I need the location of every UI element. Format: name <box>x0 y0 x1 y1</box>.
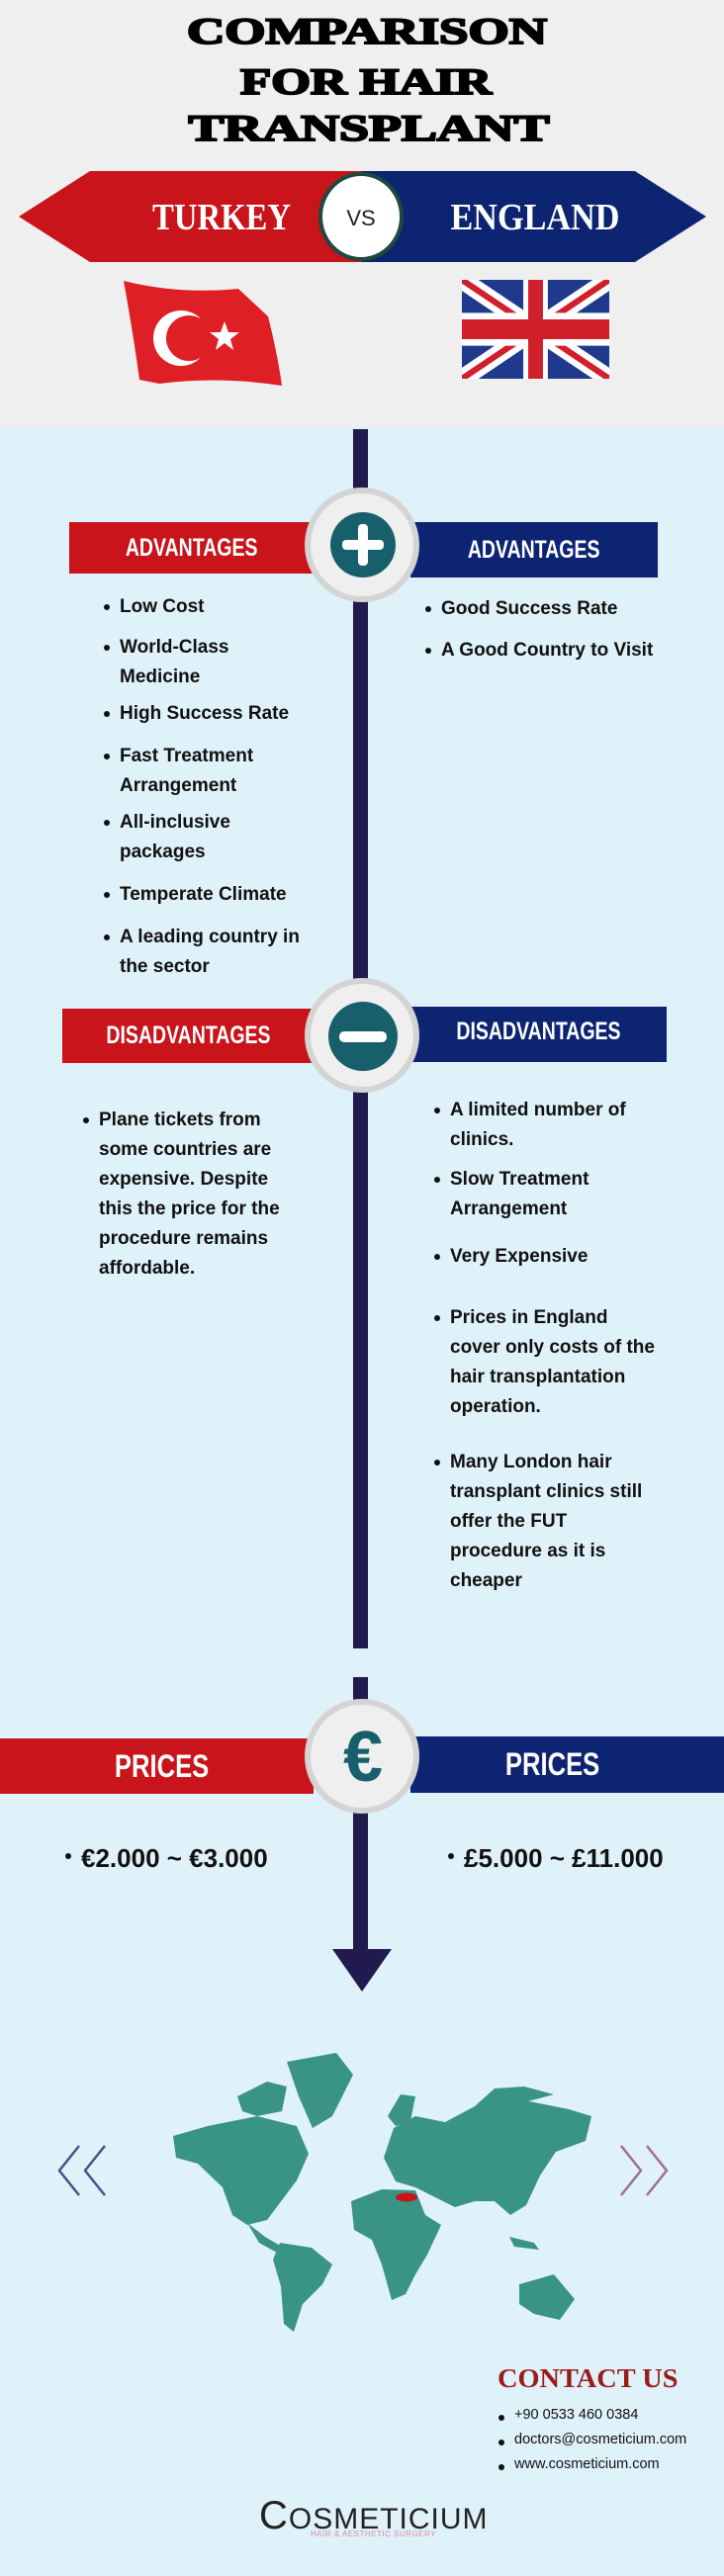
arrow head <box>332 1949 392 1992</box>
icon: euro: € <box>343 1718 383 1797</box>
contact list: doctors@cosmeticium.com <box>514 2432 686 2447</box>
list: england disadvantages: procedure as it is <box>450 1541 605 1561</box>
banner: turkey vs england: VS <box>346 206 376 230</box>
list: england advantages <box>425 598 653 661</box>
heading: england disadvantages <box>410 1007 667 1062</box>
list: turkey advantages: packages <box>120 842 206 862</box>
list: england disadvantages: Very Expensive <box>450 1246 588 1267</box>
list: turkey advantages: World-Class <box>120 637 229 658</box>
contact list <box>498 2407 686 2472</box>
icon: right chevrons <box>620 2145 669 2196</box>
list: england disadvantages: operation. <box>450 1396 541 1417</box>
icon: uk flag <box>462 280 609 379</box>
list: turkey advantages: Temperate Climate <box>120 884 287 905</box>
contact us <box>498 2363 686 2472</box>
panel: prices <box>0 1699 724 1873</box>
list: turkey disadvantages: procedure remains <box>99 1228 268 1249</box>
icon: plus <box>305 488 419 602</box>
world map <box>173 2053 591 2332</box>
list: england disadvantages: Slow Treatment <box>450 1169 588 1190</box>
text: turkey price: €2.000 ~ €3.000 <box>81 1843 268 1873</box>
list: england disadvantages: A limited number of <box>450 1100 626 1120</box>
list: england advantages: Good Success Rate <box>441 598 617 619</box>
heading: turkey prices: PRICES <box>115 1748 209 1784</box>
heading: turkey advantages <box>69 522 314 574</box>
heading: england prices: PRICES <box>505 1746 599 1782</box>
timeline line <box>353 429 368 1648</box>
list: england disadvantages: Many London hair <box>450 1452 612 1472</box>
title: TRANSPLANT <box>188 109 550 149</box>
list: turkey disadvantages <box>83 1110 280 1279</box>
heading: turkey disadvantages: DISADVANTAGES <box>106 1022 270 1049</box>
list: england disadvantages: cheaper <box>450 1570 522 1591</box>
list: turkey advantages: Low Cost <box>120 596 204 617</box>
heading: england disadvantages: DISADVANTAGES <box>456 1018 621 1045</box>
heading: turkey advantages: ADVANTAGES <box>126 534 257 562</box>
list: turkey disadvantages: some countries are <box>99 1139 271 1160</box>
title: FOR HAIR <box>240 62 494 103</box>
list: turkey disadvantages: expensive. Despite <box>99 1169 268 1190</box>
list: england disadvantages: hair transplantation <box>450 1367 625 1387</box>
title: COMPARISON <box>187 12 547 52</box>
list: turkey advantages: Medicine <box>120 666 200 687</box>
list: england disadvantages: transplant clinics still <box>450 1481 642 1502</box>
list: turkey advantages: All-inclusive <box>120 812 230 833</box>
list: turkey disadvantages: Plane tickets from <box>99 1110 261 1130</box>
panel: advantages <box>69 488 658 977</box>
panel: disadvantages <box>62 978 667 1591</box>
list: england disadvantages: clinics. <box>450 1129 513 1150</box>
banner: turkey vs england <box>19 171 706 262</box>
banner: turkey vs england: TURKEY <box>152 197 291 238</box>
list: england disadvantages: offer the FUT <box>450 1511 567 1532</box>
list: turkey advantages: Fast Treatment <box>120 746 253 766</box>
icon: minus <box>305 978 419 1093</box>
list: turkey advantages <box>104 596 300 977</box>
heading: england advantages <box>410 522 658 577</box>
contact list: www.cosmeticium.com <box>514 2456 660 2472</box>
list: england disadvantages: cover only costs of the <box>450 1337 655 1358</box>
list: england disadvantages: Prices in England <box>450 1307 607 1328</box>
list: england advantages: A Good Country to Visit <box>441 640 653 661</box>
heading: turkey prices <box>0 1738 314 1794</box>
contact list: +90 0533 460 0384 <box>514 2407 638 2423</box>
list: turkey advantages: A leading country in <box>120 927 300 947</box>
heading: turkey disadvantages <box>62 1009 314 1063</box>
banner: turkey vs england: ENGLAND <box>451 197 619 238</box>
list: england disadvantages: Arrangement <box>450 1199 567 1219</box>
list: turkey disadvantages: this the price for the <box>99 1199 280 1219</box>
heading: england prices <box>410 1736 724 1793</box>
list: turkey advantages: High Success Rate <box>120 703 289 724</box>
heading: contact us: CONTACT US <box>498 2363 678 2393</box>
text: england price: £5.000 ~ £11.000 <box>464 1843 664 1873</box>
icon: left chevrons <box>57 2145 106 2196</box>
list: turkey advantages: the sector <box>120 956 210 977</box>
list: turkey disadvantages: affordable. <box>99 1258 195 1279</box>
top header background <box>0 0 724 427</box>
heading: england advantages: ADVANTAGES <box>468 536 600 564</box>
list: england disadvantages <box>434 1100 655 1591</box>
title <box>187 12 550 149</box>
icon: turkey flag <box>124 281 282 386</box>
icon: euro <box>305 1699 419 1814</box>
list: turkey advantages: Arrangement <box>120 775 236 796</box>
logo: cosmeticium: COSMETICIUM <box>259 2494 489 2537</box>
logo: cosmeticium: HAIR & AESTHETIC SURGERY <box>311 2530 436 2538</box>
